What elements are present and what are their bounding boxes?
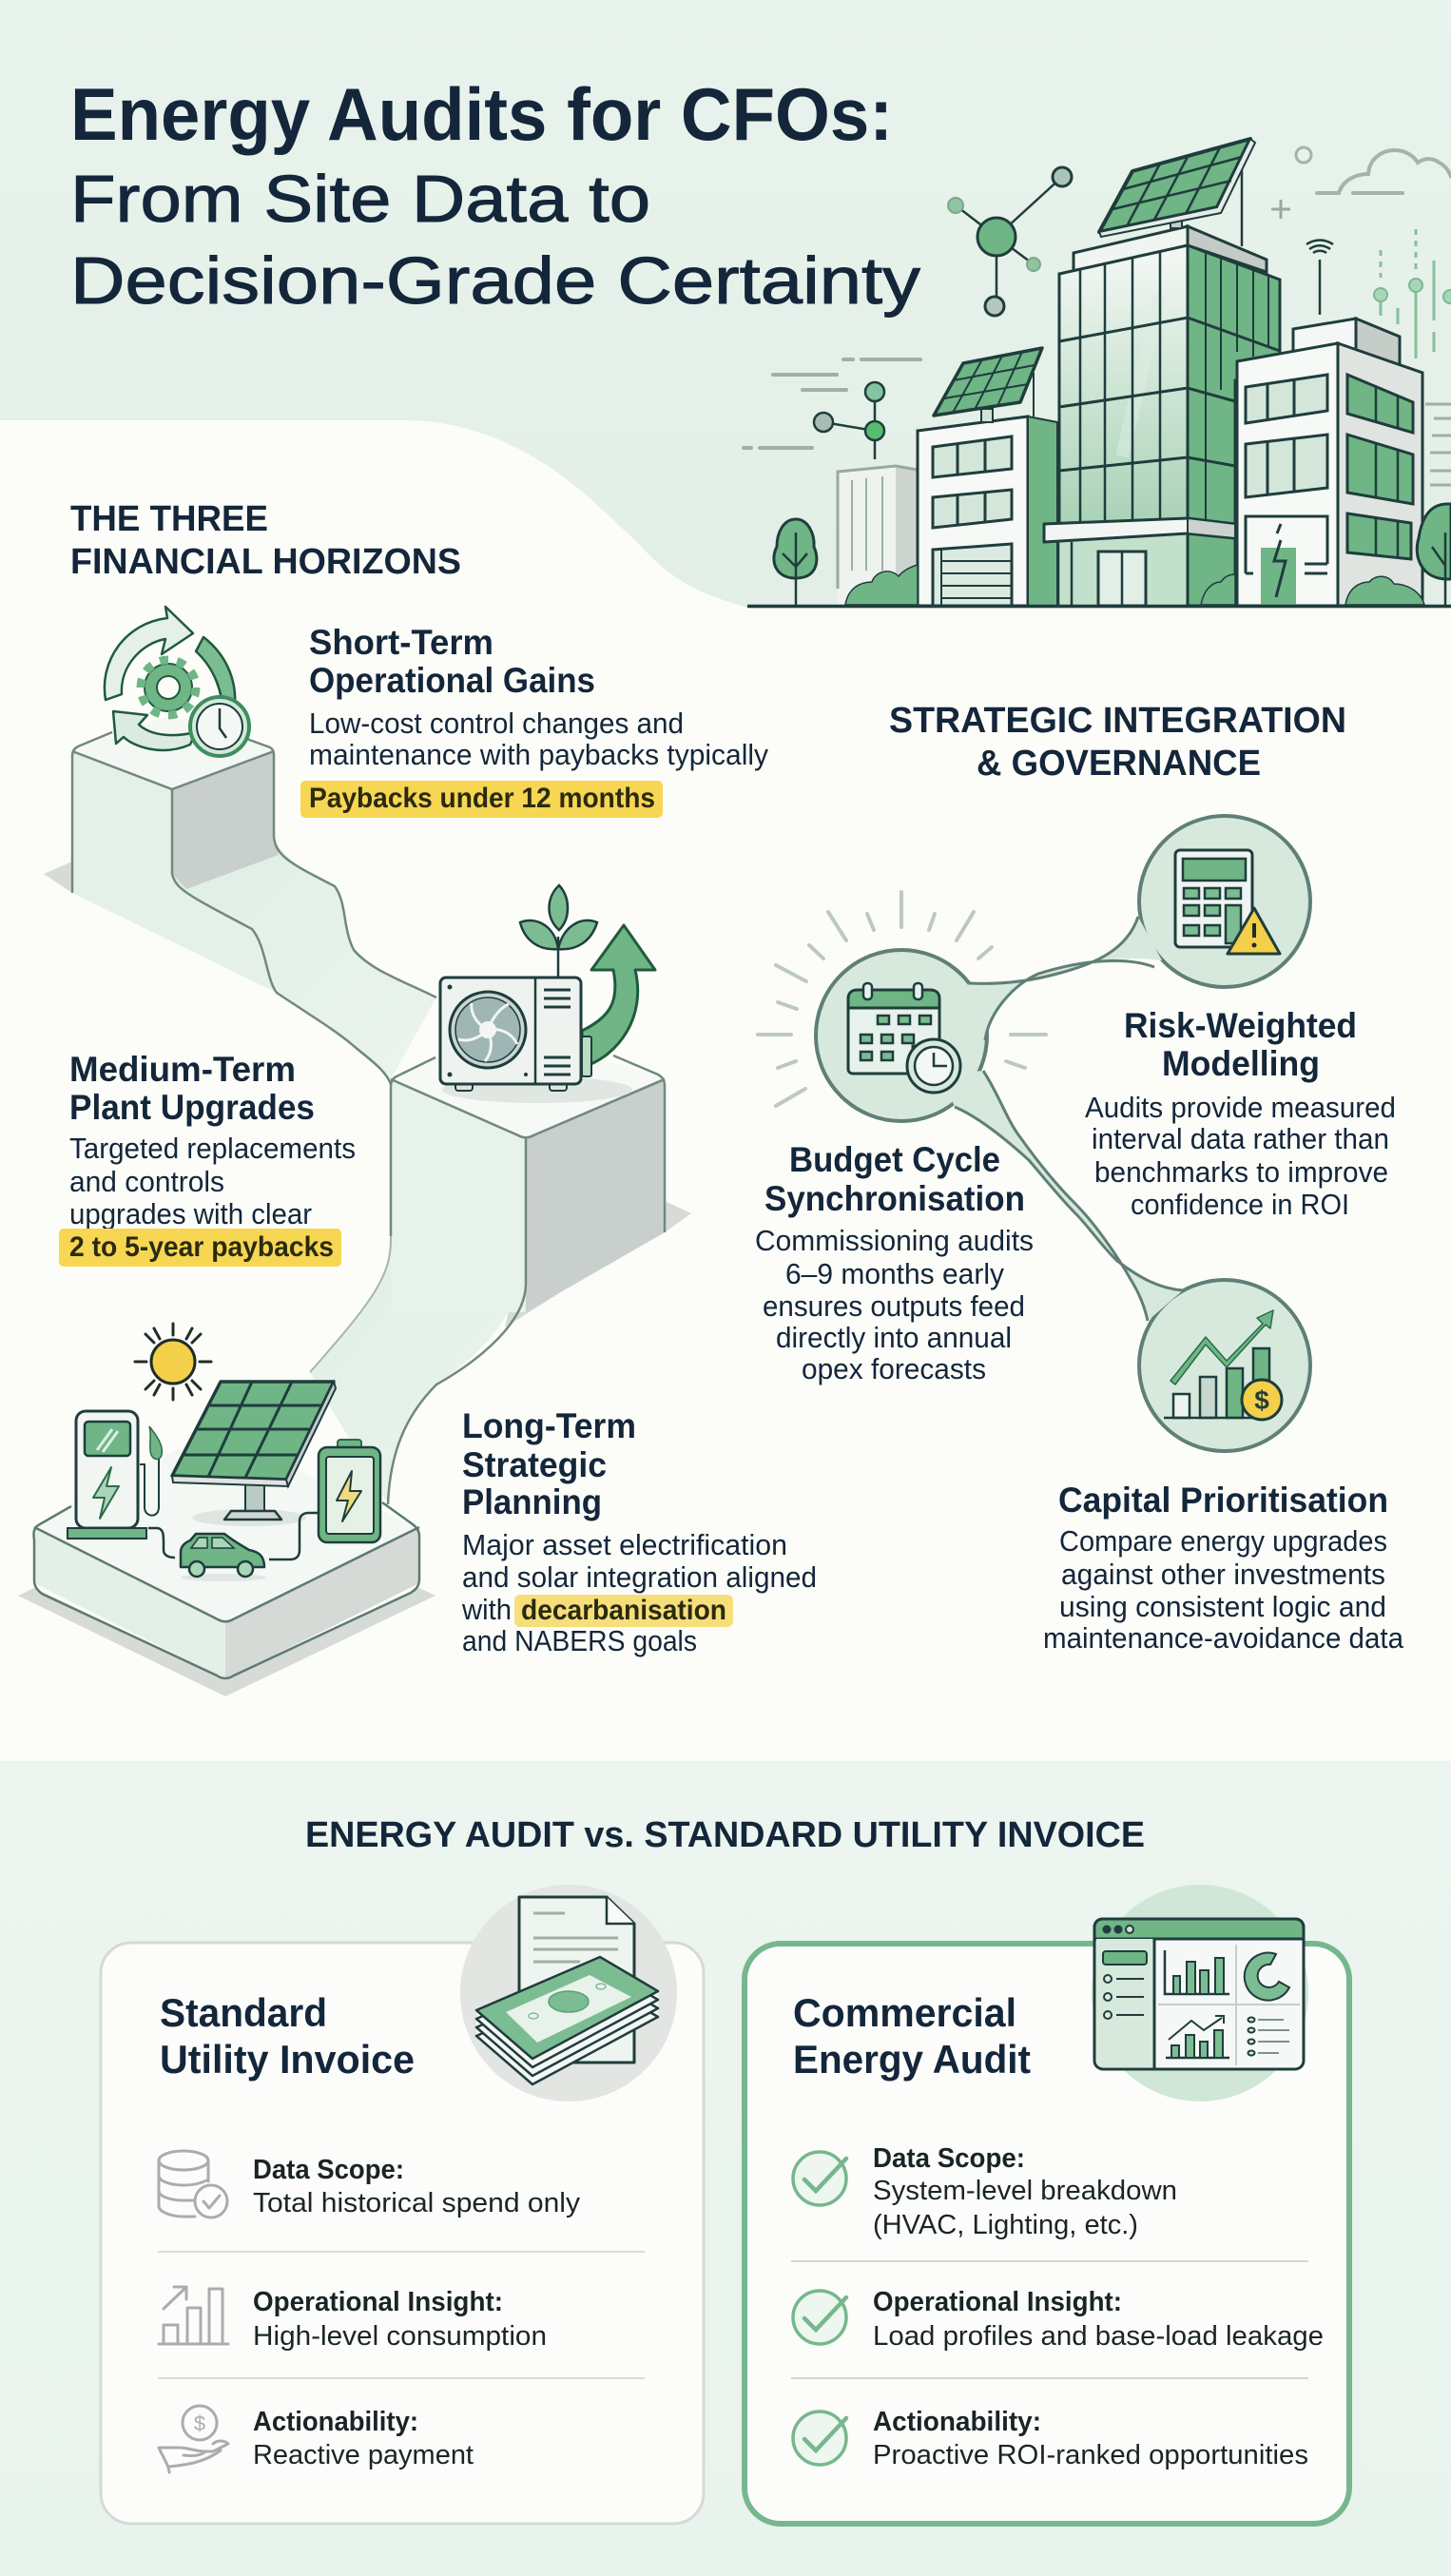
ribbon one [172, 840, 436, 1079]
panel: long-term planning: and solar integration aligned [462, 1560, 817, 1594]
icon: dashboard window [1092, 1885, 1308, 2101]
heading: three financial horizons [70, 499, 461, 582]
panel: budget cycle: ensures outputs feed [763, 1289, 1025, 1323]
panel: budget cycle: opex forecasts [802, 1352, 986, 1385]
heading: strategic integration [889, 701, 1346, 784]
building: back left [838, 466, 918, 606]
panel: risk-weighted modelling: confidence in ROI [1131, 1188, 1349, 1221]
panel: short-term gains: Low-cost control changes and [309, 707, 684, 740]
panel: short-term gains: Operational Gains [309, 661, 595, 700]
icon: check two [793, 2291, 846, 2344]
step three platform [33, 1436, 419, 1679]
panel: capital prioritisation: Capital Prioritisation [1058, 1481, 1388, 1520]
panel: risk-weighted modelling: Risk-Weighted [1124, 1006, 1357, 1045]
step one [72, 717, 436, 1084]
panel: long-term planning: Strategic [462, 1445, 607, 1484]
icon: bars, arrow and coin [1164, 1310, 1282, 1420]
panel: medium-term upgrades [59, 1050, 356, 1267]
row: actionability: Reactive payment [253, 2440, 474, 2470]
step one lower face [72, 750, 277, 993]
ribbon two [310, 1236, 526, 1504]
card heading: Commercial [793, 1990, 1016, 2035]
row: operational insight [253, 2287, 547, 2352]
row: data scope [253, 2155, 581, 2218]
icon: wifi mast and data traces [1306, 229, 1451, 358]
row: operational insight: Load profiles and base-load leakage [873, 2321, 1324, 2352]
heading: strategic integration: & GOVERNANCE [977, 744, 1261, 784]
icon: network large [948, 167, 1072, 316]
icon: simple bar chart [159, 2287, 228, 2344]
icon: hand with coin: $ [194, 2411, 205, 2435]
highlight: 2 to 5-year paybacks: 2 to 5-year paybacks [69, 1231, 334, 1263]
panel: medium-term upgrades: and controls [69, 1165, 224, 1198]
node: risk [1139, 816, 1310, 987]
battery [338, 1440, 361, 1449]
row: operational insight [873, 2287, 1324, 2352]
illustration: green city buildings [744, 139, 1451, 607]
icon: network small [814, 382, 884, 459]
panel: commercial energy audit [745, 1885, 1349, 2524]
panel: long-term planning: Long-Term [462, 1406, 636, 1445]
icon: check three [793, 2411, 846, 2465]
title: Decision-Grade Certainty [70, 243, 920, 318]
title [70, 72, 920, 318]
heading: strategic integration: STRATEGIC INTEGRATION [889, 701, 1346, 741]
ground line [747, 605, 1451, 608]
row: data scope: Data Scope: [253, 2155, 404, 2185]
wires [148, 1513, 319, 1559]
row: actionability: Actionability: [253, 2407, 418, 2437]
icon: sun, EV charger, solar panel, battery, car [68, 1324, 380, 1581]
solar panel [172, 1382, 334, 1480]
panel: medium-term upgrades: upgrades with clear [69, 1197, 312, 1230]
panel: capital prioritisation: using consistent logic and [1059, 1590, 1386, 1623]
row: actionability: Proactive ROI-ranked opportunities [873, 2440, 1308, 2470]
node: budget [816, 950, 987, 1121]
icon: check one [793, 2152, 846, 2205]
panel: risk-weighted modelling: interval data rather than [1092, 1122, 1389, 1155]
solar panel: small [934, 348, 1042, 422]
icon: recycle gear and clock [105, 607, 249, 756]
panel: budget cycle: Synchronisation [764, 1179, 1025, 1218]
highlight: payback under 12 months: Paybacks under 12 months [309, 783, 655, 814]
row: actionability [873, 2407, 1308, 2470]
charger [76, 1411, 138, 1528]
heading: three financial horizons: THE THREE [70, 499, 268, 539]
panel: long-term planning: and NABERS goals [462, 1624, 697, 1657]
row: data scope [873, 2143, 1177, 2240]
rays around budget node [758, 892, 1046, 1106]
car [181, 1574, 266, 1581]
title: Energy Audits for CFOs: [70, 72, 893, 156]
card heading: Utility Invoice [160, 2037, 415, 2082]
card heading [793, 1990, 1031, 2082]
building: right block [1237, 319, 1451, 606]
panel: long-term planning: with [461, 1593, 512, 1626]
panel: short-term gains [300, 623, 768, 818]
row: data scope: Total historical spend only [253, 2188, 581, 2218]
card heading: Standard [160, 1990, 327, 2035]
panel: medium-term upgrades: Medium-Term [69, 1050, 296, 1089]
solar panel: large [1099, 139, 1255, 246]
panel: standard utility invoice [101, 1885, 704, 2524]
panel: medium-term upgrades: Plant Upgrades [69, 1088, 315, 1127]
panel: capital prioritisation: maintenance-avoidance data [1043, 1621, 1404, 1655]
panel: short-term gains: maintenance with paybacks typically [309, 738, 768, 771]
comparison section background [0, 1761, 1451, 2576]
panel: budget cycle: Commissioning audits [755, 1224, 1034, 1257]
panel: budget cycle [755, 1140, 1034, 1385]
panel: capital prioritisation: against other investments [1061, 1558, 1385, 1591]
panel: risk-weighted modelling: Audits provide measured [1085, 1091, 1396, 1124]
panel: long-term planning: Planning [462, 1482, 602, 1521]
highlight: decarbanisation: decarbanisation [521, 1595, 726, 1626]
title: From Site Data to [70, 162, 650, 236]
panel: short-term gains: Short-Term [309, 623, 493, 662]
row: actionability [253, 2407, 474, 2470]
sun [135, 1324, 211, 1400]
row: data scope: System-level breakdown [873, 2176, 1177, 2206]
tree left [774, 519, 817, 606]
connector: budget to risk [951, 917, 1162, 1040]
icon: database check [159, 2151, 227, 2218]
panel: long-term planning [461, 1406, 817, 1657]
icon: calendar with clock [848, 983, 960, 1093]
header background wave [0, 0, 1451, 609]
row: operational insight: High-level consumption [253, 2321, 547, 2352]
stand [245, 1483, 264, 1511]
building: canopy and lobby [1044, 518, 1235, 606]
bushes [845, 565, 1424, 605]
building: main tower [1059, 226, 1280, 525]
card heading [160, 1990, 415, 2082]
panel: long-term planning: Major asset electrification [462, 1528, 787, 1561]
heading: three financial horizons: FINANCIAL HORIZONS [70, 542, 461, 582]
icon: air conditioning unit with plant and arrow [440, 885, 655, 1103]
panel: budget cycle: 6–9 months early [785, 1257, 1004, 1290]
icon: calculator with warning [1175, 850, 1280, 954]
panel: medium-term upgrades: Targeted replacements [69, 1132, 356, 1165]
row: data scope: Data Scope: [873, 2143, 1025, 2174]
node: capital [1139, 1280, 1310, 1451]
panel: risk-weighted modelling: Modelling [1162, 1044, 1320, 1083]
tree right [1417, 504, 1451, 606]
panel: capital prioritisation: Compare energy upgrades [1059, 1524, 1387, 1558]
panel: risk-weighted modelling [1085, 1006, 1396, 1221]
panel: budget cycle: Budget Cycle [789, 1140, 1000, 1179]
row: operational insight: Operational Insight: [253, 2287, 503, 2317]
panel: capital prioritisation [1043, 1481, 1404, 1655]
row: operational insight: Operational Insight: [873, 2287, 1122, 2317]
panel: budget cycle: directly into annual [776, 1321, 1012, 1354]
icon: bars, arrow and coin: $ [1254, 1385, 1269, 1415]
icon: hand with coin [159, 2406, 228, 2472]
panel shadow [192, 1509, 306, 1526]
decorative dashes [744, 359, 920, 448]
panel: risk-weighted modelling: benchmarks to improve [1094, 1155, 1388, 1189]
row: actionability: Actionability: [873, 2407, 1041, 2437]
icon: invoice and cash [460, 1885, 677, 2101]
step two [310, 1051, 665, 1504]
step shadows [18, 862, 691, 1696]
building: left block [918, 416, 1057, 606]
card heading: Energy Audit [793, 2037, 1031, 2082]
icon: cloud [1271, 147, 1451, 219]
connected node network [816, 816, 1310, 1451]
row: data scope: (HVAC, Lighting, etc.) [873, 2210, 1138, 2240]
connector: budget to capital [941, 1071, 1183, 1321]
staircase: connected isometric steps [18, 717, 691, 1696]
heading: audit vs invoice: ENERGY AUDIT vs. STANDARD UTILITY INVOICE [305, 1815, 1145, 1855]
